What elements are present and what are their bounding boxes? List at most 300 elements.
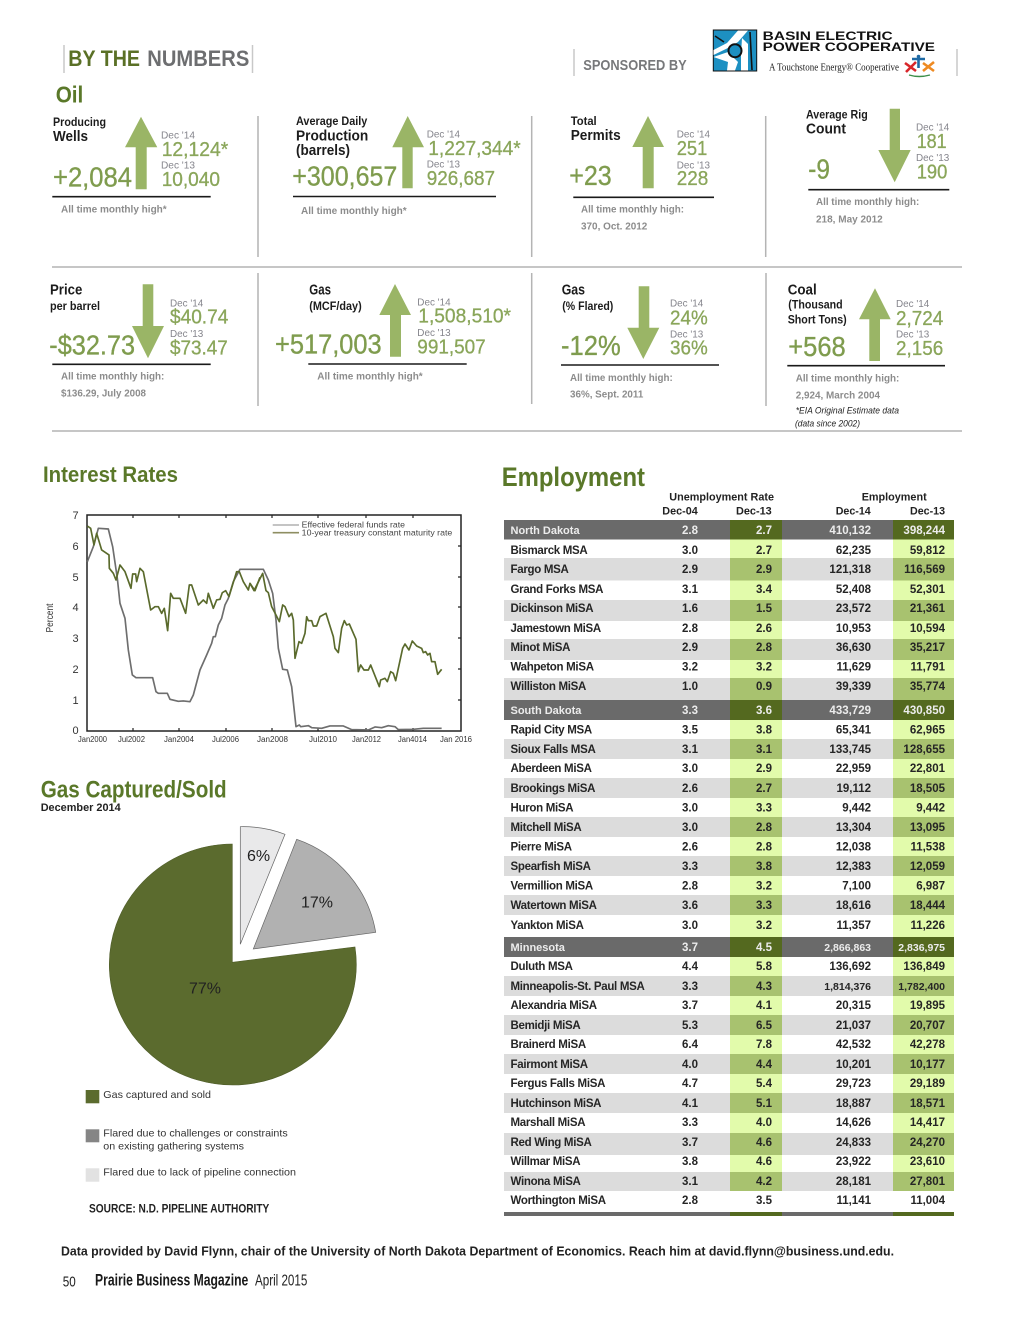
- table column headers: Dec-14: [836, 505, 872, 517]
- pie legend: Gas captured and sold: [103, 1089, 211, 1101]
- sponsored by: SPONSORED BY: [583, 57, 687, 74]
- row: Minot: 2.8: [756, 642, 773, 654]
- stat: average rig count: 181: [917, 131, 947, 153]
- stat: producing wells: All time monthly high*: [61, 204, 167, 215]
- row: Jamestown: 10,953: [836, 623, 871, 635]
- table: employment: [504, 492, 954, 1216]
- stat: gas percent flared: -12%: [561, 330, 621, 361]
- row: Brainerd: 6.4: [682, 1039, 699, 1051]
- row: Minnesota: 3.7: [682, 942, 698, 954]
- stat: total permits: 228: [677, 168, 708, 190]
- table column headers: [662, 492, 945, 517]
- stat: price per barrel: Dec '14: [170, 298, 204, 309]
- stat: price per barrel: -$32.73: [49, 329, 135, 360]
- logo: basin electric power cooperative: POWER COOPERATIVE: [763, 40, 935, 54]
- row: Dickinson: Dickinson MiSA: [510, 603, 593, 615]
- header: by the numbers: [64, 45, 252, 73]
- row: Yankton: [510, 915, 954, 937]
- row: Duluth: 136,849: [903, 961, 945, 973]
- footer credit: Data provided by David Flynn, chair of the University of North Dakota Department of Economics. Reach him at david.flynn@business.und.edu.: [61, 1245, 894, 1259]
- stat: gas mcf per day: Gas: [309, 282, 331, 298]
- row: Fargo: 116,569: [904, 564, 945, 576]
- row: Brainerd: 7.8: [756, 1039, 773, 1051]
- row: Minnesota: Minnesota: [510, 942, 566, 954]
- row: Williston: Williston MiSA: [510, 681, 586, 693]
- row: Duluth: 136,692: [829, 961, 871, 973]
- row: Red Wing: [504, 1133, 954, 1155]
- row: Sioux Falls: 3.1: [756, 744, 773, 756]
- row: Fairmont: 4.4: [756, 1059, 773, 1071]
- row: Mitchell: [504, 817, 954, 837]
- row: Dickinson: [504, 600, 954, 621]
- row: Watertown: 3.6: [682, 900, 698, 912]
- stat: total permits: All time monthly high:: [581, 205, 684, 216]
- row: Alexandria: Alexandria MiSA: [510, 1000, 597, 1012]
- row: Spearfish: 12,383: [836, 861, 871, 873]
- row: Fairmont: 10,201: [836, 1059, 872, 1071]
- row: Jamestown: 2.8: [682, 623, 699, 635]
- row: Vermillion: [510, 876, 954, 895]
- row: Fargo: 121,318: [829, 564, 872, 576]
- row: Sioux Falls: Sioux Falls MSA: [510, 744, 595, 756]
- row: Winona: 3.1: [682, 1176, 699, 1188]
- row: Grand Forks: Grand Forks MSA: [510, 584, 603, 596]
- row: Vermillion: 7,100: [842, 880, 871, 892]
- heading: interest rates: Interest Rates: [43, 462, 178, 487]
- row: Fergus Falls: 29,189: [910, 1078, 945, 1090]
- row: Hutchinson: Hutchinson MiSA: [510, 1098, 601, 1110]
- row: Mitchell: 13,095: [910, 822, 946, 834]
- row: Williston: 1.0: [682, 681, 698, 693]
- stat: average daily production: Production: [296, 129, 368, 145]
- row: Willmar: [510, 1155, 954, 1172]
- row: Willmar: 23,922: [836, 1156, 871, 1168]
- row: North Dakota: 410,132: [829, 525, 871, 537]
- row: Dickinson: 21,361: [910, 603, 946, 615]
- table column headers: Dec-04: [662, 505, 699, 517]
- table column headers: Employment: [862, 492, 927, 504]
- arrow: up: [392, 116, 424, 188]
- stat: price per barrel: $73.47: [170, 337, 228, 359]
- pie legend: on existing gathering systems: [103, 1140, 244, 1152]
- row: Marshall: 14,626: [836, 1117, 871, 1129]
- row: Wahpeton: 11,791: [910, 662, 946, 674]
- logo: basin electric power cooperative: [713, 29, 957, 76]
- stat: price per barrel: $40.74: [170, 307, 228, 329]
- stat: total permits: +23: [569, 160, 612, 191]
- stat: coal: [787, 282, 945, 429]
- row: Winona: [504, 1172, 954, 1191]
- y axis labels: 7: [72, 510, 79, 522]
- row: Minot: 35,217: [910, 642, 945, 654]
- stat: total permits: 251: [677, 138, 707, 160]
- stat: coal: 2,724: [896, 308, 943, 330]
- stat: average rig count: Count: [806, 121, 846, 137]
- row: Fargo: 2.9: [756, 564, 772, 576]
- row: Fergus Falls: [510, 1074, 954, 1093]
- x axis labels: Jul2010: [309, 735, 338, 744]
- row: Duluth: [510, 957, 954, 976]
- stat: total permits: Permits: [571, 128, 621, 144]
- stat: gas percent flared: 24%: [670, 307, 708, 329]
- row: Alexandria: [510, 996, 954, 1015]
- y axis labels: 4: [72, 602, 79, 614]
- header: by the numbers: NUMBERS: [147, 46, 249, 71]
- row: Marshall: 3.3: [682, 1117, 698, 1129]
- row: Winona: 27,801: [910, 1176, 946, 1188]
- row: Bismarck: 62,235: [836, 545, 872, 557]
- arrow: up: [125, 117, 157, 189]
- row: Bemidji: Bemidji MiSA: [510, 1020, 580, 1032]
- pie legend: [86, 1089, 296, 1182]
- row: Fergus Falls: 4.7: [682, 1078, 698, 1090]
- stat: gas percent flared: Dec '13: [670, 329, 704, 340]
- stat: coal: Coal: [788, 282, 817, 298]
- row: Watertown: 3.3: [756, 900, 772, 912]
- x axis labels: [78, 735, 473, 744]
- row: Huron: 9,442: [842, 802, 871, 814]
- row: Bemidji: [504, 1015, 954, 1035]
- row: Worthington: [510, 1195, 946, 1207]
- stat: gas mcf per day: Dec '14: [417, 298, 451, 309]
- x axis labels: Jul2002: [118, 735, 146, 744]
- row: Minneapolis-St. Paul: [504, 976, 954, 996]
- row: Worthington: 11,004: [910, 1195, 946, 1207]
- row: Bemidji: 21,037: [836, 1020, 871, 1032]
- row: Hutchinson: [504, 1093, 954, 1113]
- row: South Dakota: 3.3: [682, 705, 698, 717]
- row: Wahpeton: Wahpeton MiSA: [510, 662, 594, 674]
- row: Fairmont: 10,177: [910, 1059, 945, 1071]
- stat: coal: +568: [788, 331, 846, 362]
- row: Red Wing: 4.6: [756, 1137, 772, 1149]
- stat: gas mcf per day: +517,003: [275, 328, 382, 359]
- row: Spearfish: 12,059: [910, 861, 945, 873]
- table column headers: Unemployment Rate: [669, 492, 774, 504]
- row: Watertown: 18,444: [910, 900, 946, 912]
- row: Worthington: 2.8: [682, 1195, 699, 1207]
- row: Fargo: [504, 558, 954, 580]
- row: Minnesota: 2,836,975: [898, 942, 945, 954]
- row: Hutchinson: 5.1: [756, 1098, 773, 1110]
- stat: average rig count: Dec '13: [916, 153, 950, 164]
- row: Brookings: Brookings MiSA: [510, 783, 595, 795]
- stat: average rig count: Average Rig: [806, 110, 868, 122]
- arrow: up: [859, 288, 891, 361]
- stat: gas percent flared: 36%, Sept. 2011: [570, 390, 644, 401]
- row: South Dakota: 430,850: [903, 705, 945, 717]
- row: Winona: Winona MiSA: [510, 1176, 581, 1188]
- row: Huron: 9,442: [916, 802, 945, 814]
- row: Williston: 39,339: [836, 681, 871, 693]
- row: Bismarck: 3.0: [682, 545, 698, 557]
- chart legend: 10-year treasury constant maturity rate: [302, 528, 453, 538]
- row: Brookings: 2.6: [682, 783, 698, 795]
- pie legend: Flared due to lack of pipeline connection: [103, 1166, 296, 1178]
- stat: coal: (data since 2002): [795, 419, 860, 429]
- stat: average rig count: [806, 109, 950, 225]
- row: Marshall: 4.0: [756, 1117, 772, 1129]
- stat: price per barrel: Dec '13: [170, 329, 204, 340]
- row: Mitchell: 3.0: [682, 822, 698, 834]
- row: Grand Forks: 3.1: [682, 584, 699, 596]
- row: Bismarck: 59,812: [910, 545, 945, 557]
- row: Spearfish: [504, 856, 954, 876]
- row: Vermillion: 6,987: [916, 880, 945, 892]
- stat: coal: Dec '13: [896, 330, 930, 341]
- stat: producing wells: Dec '14: [161, 130, 195, 141]
- row: Duluth: 4.4: [682, 961, 699, 973]
- stat: price per barrel: [49, 282, 228, 400]
- row: Minot: [504, 639, 954, 660]
- table bottom bar: [504, 1212, 954, 1216]
- footer: page and magazine: April 2015: [255, 1273, 307, 1290]
- row: Dickinson: 23,572: [836, 603, 871, 615]
- stat: coal: All time monthly high:: [796, 374, 899, 385]
- icon: basin electric pinwheel: [713, 30, 757, 71]
- row: Watertown: [504, 895, 954, 915]
- y axis labels: 0: [72, 725, 79, 737]
- row: Fergus Falls: 5.4: [756, 1078, 773, 1090]
- stat: coal: Dec '14: [896, 299, 930, 310]
- row: Huron: [510, 798, 954, 817]
- arrow: up: [632, 116, 664, 188]
- stat: gas percent flared: [561, 282, 719, 401]
- x axis labels: Jul2006: [212, 735, 240, 744]
- stat: coal: *EIA Original Estimate data: [796, 405, 899, 415]
- row: Williston: 0.9: [756, 681, 772, 693]
- slice: 77%: 77%: [189, 980, 221, 998]
- stat: coal: 2,924, March 2004: [796, 390, 880, 401]
- stat: gas mcf per day: Dec '13: [417, 328, 451, 339]
- pie chart: gas captured/sold: [109, 827, 376, 1085]
- row: Jamestown: Jamestown MiSA: [510, 623, 601, 635]
- stat: average daily production: Dec '14: [427, 130, 460, 141]
- pie legend: Flared due to challenges or constraints: [103, 1128, 288, 1140]
- row: Wahpeton: 3.2: [682, 662, 698, 674]
- stat: total permits: Dec '13: [677, 160, 710, 171]
- row: Brainerd: 42,278: [910, 1039, 946, 1051]
- row: Rapid City: 65,341: [836, 724, 872, 736]
- header: by the numbers: BY THE: [68, 46, 140, 71]
- heading: oil: Oil: [56, 82, 83, 108]
- heading: gas captured/sold: December 2014: [41, 802, 122, 814]
- table column headers: Dec-13: [736, 505, 772, 517]
- stat: total permits: 370, Oct. 2012: [581, 221, 648, 232]
- row: Aberdeen: 22,959: [836, 763, 871, 775]
- stat: gas mcf per day: 1,508,510*: [418, 305, 511, 327]
- icon: touchstone people: [905, 55, 934, 76]
- row: Yankton: 11,357: [836, 920, 871, 932]
- row: Red Wing: 24,833: [836, 1137, 871, 1149]
- row: Fairmont: Fairmont MiSA: [510, 1059, 588, 1071]
- x axis labels: Jan 2016: [440, 735, 473, 744]
- row: Sioux Falls: [504, 739, 954, 759]
- row: Spearfish: 3.8: [756, 861, 773, 873]
- arrow: down: [132, 284, 164, 358]
- row: Grand Forks: 3.4: [756, 584, 773, 596]
- x axis labels: Jan2012: [352, 735, 382, 744]
- row: Bismarck: Bismarck MSA: [510, 545, 587, 557]
- slice: 6%: 6%: [247, 848, 270, 865]
- x axis labels: Jan2008: [257, 735, 289, 744]
- row: Brainerd: [510, 1035, 954, 1054]
- stat: average daily production: 1,227,344*: [428, 138, 521, 160]
- stat: producing wells: 10,040: [162, 169, 220, 191]
- logo: basin electric power cooperative: A Touchstone Energy® Cooperative: [769, 63, 899, 74]
- stat: average daily production: [292, 116, 521, 217]
- stat: producing wells: +2,084: [53, 162, 132, 193]
- row: Bemidji: 6.5: [756, 1020, 773, 1032]
- row: Willmar: Willmar MiSA: [510, 1156, 580, 1168]
- y axis labels: 6: [72, 541, 79, 553]
- stat: gas mcf per day: 991,507: [417, 336, 486, 358]
- row: Watertown: 18,616: [836, 900, 871, 912]
- row: Bemidji: 5.3: [682, 1020, 698, 1032]
- row: Pierre: 12,038: [836, 842, 872, 854]
- row: Bismarck: [510, 540, 954, 558]
- arrow: up: [379, 284, 411, 357]
- row: Rapid City: 62,965: [910, 724, 946, 736]
- y axis title: Percent: [45, 603, 56, 632]
- row: Williston: 35,774: [910, 681, 946, 693]
- row: Yankton: 3.2: [756, 920, 772, 932]
- row: Hutchinson: 4.1: [682, 1098, 699, 1110]
- row: Pierre: 11,538: [910, 842, 946, 854]
- stat: total permits: [569, 116, 714, 232]
- stat: gas percent flared: 36%: [670, 337, 708, 359]
- row: North Dakota: 2.8: [682, 525, 699, 537]
- row: Sioux Falls: 128,655: [903, 744, 946, 756]
- row: Willmar: 23,610: [910, 1156, 945, 1168]
- footer: page and magazine: Prairie Business Magazine: [95, 1271, 248, 1290]
- stat: gas mcf per day: All time monthly high*: [317, 371, 423, 382]
- stat: average daily production: (barrels): [296, 143, 350, 159]
- row: Alexandria: 19,895: [910, 1000, 946, 1012]
- row: Wahpeton: 3.2: [756, 662, 772, 674]
- row: Minnesota: 2,866,863: [824, 942, 871, 954]
- slice: 17%: 17%: [301, 894, 333, 912]
- stat: average rig count: -9: [808, 153, 830, 184]
- row: North Dakota: 2.7: [756, 525, 772, 537]
- y axis labels: 3: [72, 633, 79, 645]
- row: Minnesota: [504, 937, 954, 957]
- row: Fairmont: 4.0: [682, 1059, 698, 1071]
- row: Huron: Huron MiSA: [510, 802, 573, 814]
- slice: 17%: [253, 839, 376, 949]
- row: Wahpeton: [510, 660, 954, 678]
- row: Duluth: 5.8: [756, 961, 773, 973]
- stat: producing wells: 12,124*: [162, 139, 228, 161]
- row: Rapid City: 3.5: [682, 724, 699, 736]
- row: South Dakota: 3.6: [756, 705, 772, 717]
- stat: average daily production: +300,657: [292, 161, 397, 192]
- row: Pierre: 2.6: [682, 842, 698, 854]
- series: 10-year treasury constant maturity rate: [87, 526, 442, 687]
- stat: producing wells: [52, 117, 228, 215]
- source: SOURCE: N.D. PIPELINE AUTHORITY: [89, 1204, 270, 1216]
- row: Yankton: 3.0: [682, 920, 698, 932]
- row: Worthington: Worthington MiSA: [510, 1195, 606, 1207]
- chart legend: Effective federal funds rate: [302, 519, 405, 529]
- row: Pierre: 2.8: [756, 842, 773, 854]
- row: Red Wing: 24,270: [910, 1137, 945, 1149]
- row: Mitchell: 13,304: [836, 822, 872, 834]
- x axis labels: Jan4014: [398, 735, 428, 744]
- stat: gas percent flared: Dec '14: [670, 299, 704, 310]
- row: Marshall: [510, 1113, 954, 1133]
- row: Vermillion: 3.2: [756, 880, 772, 892]
- stat: average daily production: 926,687: [427, 168, 495, 190]
- stat: average daily production: Dec '13: [427, 160, 460, 171]
- row: South Dakota: South Dakota: [510, 705, 582, 717]
- row: Grand Forks: [510, 580, 954, 600]
- row: Winona: 28,181: [836, 1176, 872, 1188]
- stat: gas mcf per day: [275, 282, 511, 382]
- y axis labels: 2: [72, 664, 79, 676]
- row: Fergus Falls: Fergus Falls MiSA: [510, 1078, 605, 1090]
- arrow: down: [878, 109, 911, 182]
- stat: total permits: Total: [571, 116, 597, 128]
- x axis labels: Jan2000: [78, 735, 108, 744]
- row: Jamestown: [510, 621, 954, 639]
- y axis labels: 5: [72, 572, 79, 584]
- row: Pierre: Pierre MiSA: [510, 842, 572, 854]
- row: Yankton: Yankton MiSA: [510, 920, 584, 932]
- row: Minneapolis-St. Paul: 1,782,400: [898, 981, 945, 993]
- row: Aberdeen: 2.9: [756, 763, 772, 775]
- row: Willmar: 3.8: [682, 1156, 699, 1168]
- stat: gas percent flared: All time monthly high:: [570, 373, 673, 384]
- slice: 77%: [109, 844, 356, 1085]
- row: Spearfish: 3.3: [682, 861, 698, 873]
- row: Watertown: Watertown MiSA: [510, 900, 597, 912]
- heading: gas captured/sold: [41, 777, 227, 814]
- row: North Dakota: North Dakota: [510, 525, 580, 537]
- stat: average rig count: 218, May 2012: [816, 214, 883, 225]
- stat: average rig count: All time monthly high:: [816, 197, 919, 208]
- row: Aberdeen: 3.0: [682, 763, 698, 775]
- row: Brainerd: Brainerd MiSA: [510, 1039, 586, 1051]
- stat: producing wells: Producing: [53, 117, 106, 129]
- stat: price per barrel: All time monthly high:: [61, 371, 164, 382]
- chart legend: [273, 519, 453, 538]
- stat: average daily production: Average Daily: [296, 116, 368, 128]
- row: Minneapolis-St. Paul: Minneapolis-St. Paul MSA: [510, 981, 645, 993]
- row: Sioux Falls: 133,745: [829, 744, 872, 756]
- row: Fargo: 2.9: [682, 564, 698, 576]
- row: Alexandria: 3.7: [682, 1000, 698, 1012]
- row: Grand Forks: 52,408: [836, 584, 872, 596]
- row: Aberdeen: [510, 759, 954, 778]
- logo: basin electric power cooperative: BASIN ELECTRIC: [763, 29, 893, 43]
- row: Brainerd: 42,532: [836, 1039, 871, 1051]
- stat: coal: 2,156: [896, 338, 943, 360]
- line chart: interest rates: [45, 510, 473, 744]
- row: Vermillion: 2.8: [682, 880, 699, 892]
- row: Rapid City: [510, 720, 954, 739]
- row: Huron: 3.3: [756, 802, 772, 814]
- row: Jamestown: 2.6: [756, 623, 772, 635]
- stat: coal: (Thousand: [788, 299, 843, 311]
- row: North Dakota: 398,244: [903, 525, 946, 537]
- row: Brookings: 18,505: [910, 783, 946, 795]
- heading: employment: Employment: [502, 462, 645, 492]
- stat: price per barrel: Price: [50, 282, 82, 298]
- footer: page and magazine: 50: [63, 1274, 76, 1291]
- row: Minot: 36,630: [836, 642, 871, 654]
- row: Dickinson: 1.6: [682, 603, 698, 615]
